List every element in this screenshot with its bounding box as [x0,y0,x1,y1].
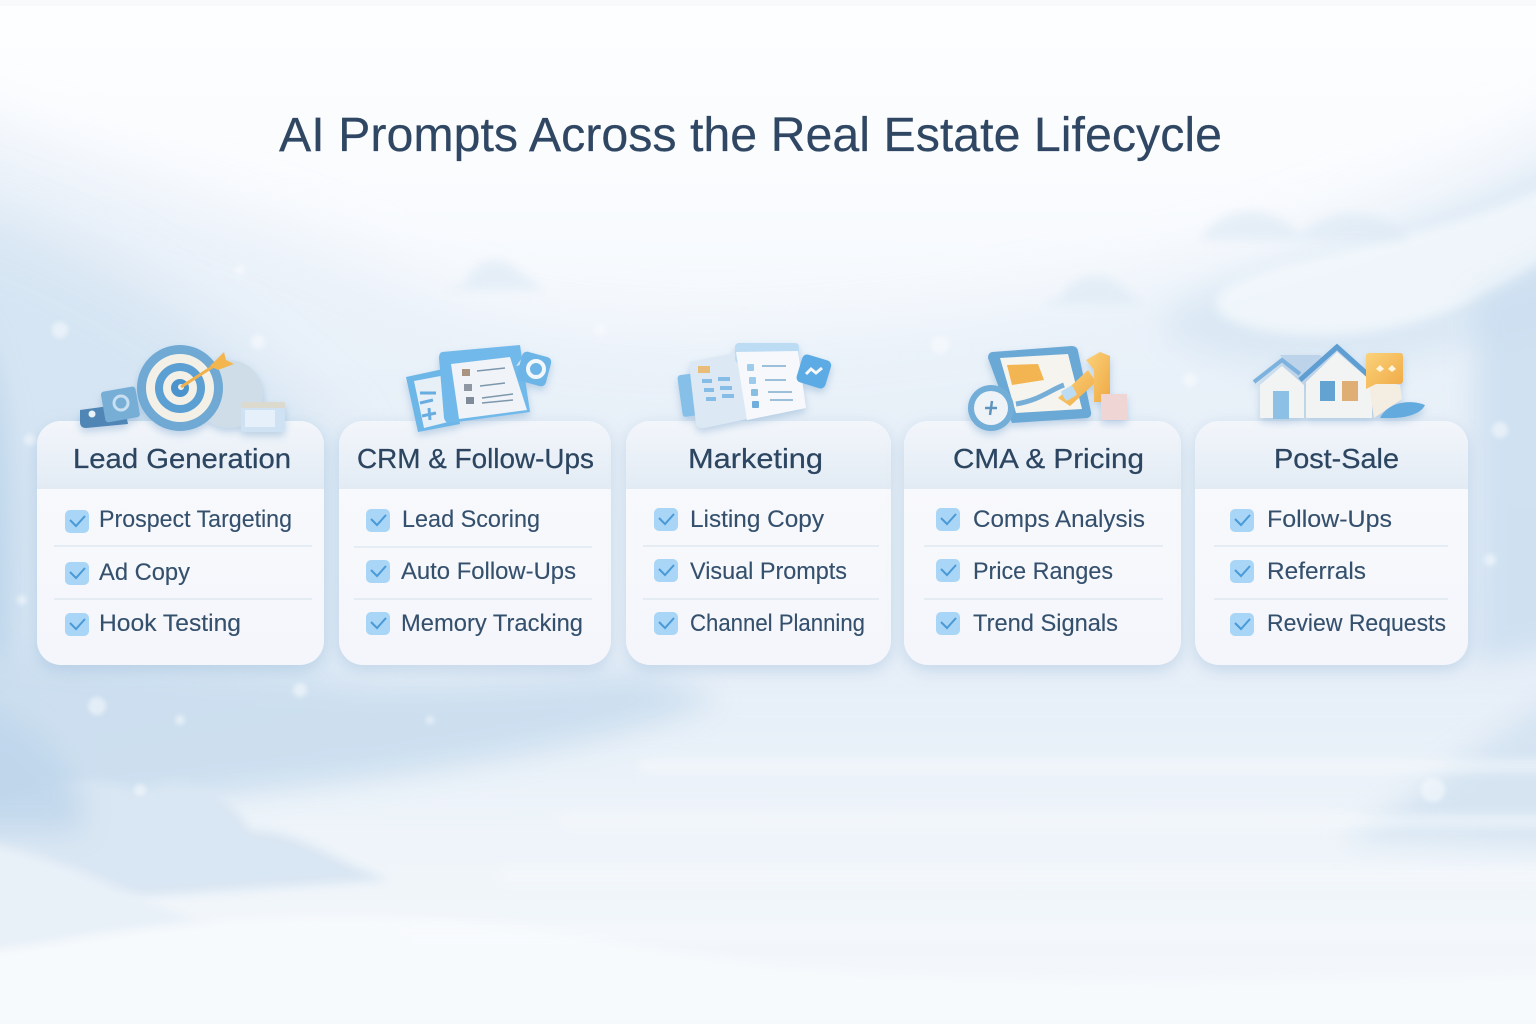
icon: houses with chat bubble [1254,347,1425,419]
checklist: CRM & Follow-Ups: Lead Scoring [402,506,540,533]
heading: Lead Generation: Lead Generation [73,443,291,474]
checklist: Lead Generation: Ad Copy [99,559,190,586]
heading: CRM & Follow-Ups: CRM & Follow-Ups [357,443,594,474]
checklist: Marketing: Visual Prompts [690,558,847,585]
icon: marketing sheets [677,343,832,428]
checklist: CMA & Pricing: Trend Signals [973,610,1118,637]
heading: CMA & Pricing: CMA & Pricing [953,443,1144,474]
checklist: Lead Generation: Prospect Targeting [99,506,292,533]
heading: Post-Sale: Post-Sale [1274,443,1399,474]
icon: CRM documents [406,345,552,432]
title: AI Prompts Across the Real Estate Lifecycle [279,109,1222,162]
checklist: Lead Generation: Hook Testing [99,610,241,637]
panel: CMA & Pricing [904,421,1181,665]
checklist: Lead Generation [65,506,292,637]
icon: CMA monitor with chart [968,346,1127,431]
panel: Marketing [626,421,891,665]
heading: Marketing: Marketing [688,443,823,474]
panel: Post-Sale [1195,421,1468,665]
checklist: CRM & Follow-Ups: Auto Follow-Ups [401,558,576,585]
icon: target with arrow [80,345,285,432]
checklist: CMA & Pricing [936,506,1145,637]
checklist: Post-Sale: Referrals [1267,558,1366,585]
checklist: CRM & Follow-Ups [366,506,583,637]
checklist: Post-Sale: Review Requests [1267,610,1446,637]
checklist: CRM & Follow-Ups: Memory Tracking [401,610,583,637]
checklist: Marketing: Channel Planning [690,610,865,637]
checklist: CMA & Pricing: Comps Analysis [973,506,1145,533]
decorative soft snow [17,265,1508,802]
checklist: Marketing [654,506,865,637]
checklist: Marketing: Listing Copy [690,506,824,533]
checklist: Post-Sale: Follow-Ups [1267,506,1392,533]
checklist: CMA & Pricing: Price Ranges [973,558,1113,585]
checklist: Post-Sale [1230,506,1446,637]
panel: CRM & Follow-Ups [339,421,611,665]
panel: Lead Generation [37,421,324,665]
